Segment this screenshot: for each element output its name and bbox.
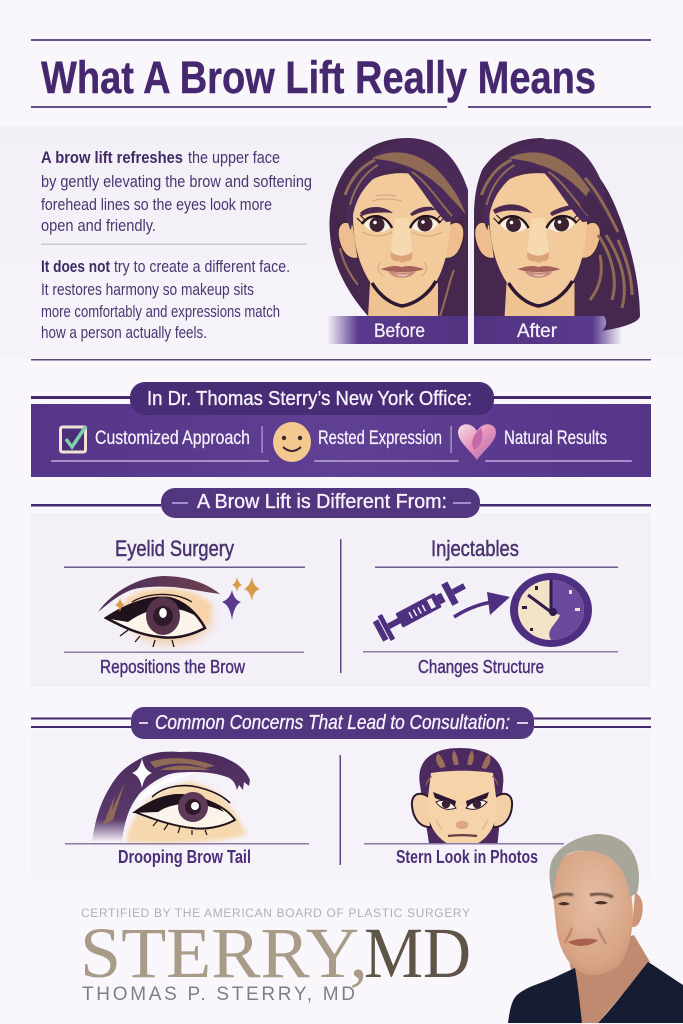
- column: drooping brow tail: Drooping Brow Tail: [118, 847, 251, 867]
- logo: Sterry MD: MD: [364, 913, 471, 993]
- logo: Sterry MD: [80, 906, 471, 1005]
- column: injectables: Changes Structure: [418, 657, 544, 677]
- column: drooping brow tail: [65, 752, 309, 867]
- column: stern look: Stern Look in Photos: [396, 847, 538, 867]
- illustration: drooping brow eye: [92, 752, 250, 844]
- illustration: before face: [330, 138, 468, 318]
- column: injectables: Injectables: [431, 536, 519, 561]
- label: before: [327, 316, 468, 344]
- text block: what a brow lift does: by gently elevating the brow and softening: [41, 172, 312, 191]
- text block: what a brow lift does: forehead lines so the eyes look more: [41, 195, 272, 214]
- text block: what a brow lift does: open and friendly.: [41, 216, 156, 235]
- logo: Sterry MD: CERTIFIED BY THE AMERICAN BOARD OF PLASTIC SURGERY: [81, 906, 470, 920]
- icon: checkbox: [60, 426, 86, 452]
- heading: common concerns: Common Concerns That Lead to Consultation:: [155, 712, 510, 734]
- benefit: rested expression: Rested Expression: [318, 428, 442, 449]
- panel: introduction: [41, 138, 640, 344]
- column: eyelid surgery: Eyelid Surgery: [115, 536, 234, 561]
- panel: common concerns: [31, 707, 651, 879]
- logo: Sterry MD: THOMAS P. STERRY, MD: [82, 984, 355, 1005]
- text block: what a brow lift does not do: more comfortably and expressions match: [41, 302, 280, 321]
- text block: what a brow lift does not do: how a person actually feels.: [41, 323, 207, 342]
- column: eyelid surgery: Repositions the Brow: [100, 657, 246, 677]
- label: before: Before: [374, 321, 425, 342]
- logo: Sterry MD: STERRY,: [80, 913, 368, 993]
- icon: clock: [510, 573, 592, 647]
- text block: what a brow lift does: the upper face: [188, 148, 280, 167]
- text block: what a brow lift does: [41, 148, 312, 235]
- illustration: stern man face: [412, 748, 512, 850]
- icon: heart: [458, 424, 496, 460]
- label: after: [474, 316, 640, 344]
- text block: what a brow lift does not do: try to create a different face.: [114, 257, 290, 276]
- label: after: After: [517, 321, 558, 342]
- heading: common concerns: [131, 707, 534, 739]
- heading: different from: [161, 488, 480, 518]
- text block: what a brow lift does not do: It restores harmony so makeup sits: [41, 280, 254, 299]
- benefit: natural results: Natural Results: [504, 428, 607, 449]
- benefit: customized approach: Customized Approach: [95, 428, 250, 449]
- text block: what a brow lift does not do: It does not: [41, 257, 110, 276]
- arrow: [454, 592, 510, 617]
- text block: what a brow lift does not do: [41, 257, 290, 342]
- column: injectables: [363, 536, 618, 677]
- heading: office: In Dr. Thomas Sterry’s New York Office:: [147, 388, 472, 410]
- column: eyelid surgery: [64, 536, 305, 677]
- text block: what a brow lift does: A brow lift refreshes: [41, 148, 183, 167]
- panel: different from: [31, 488, 651, 687]
- panel: office benefits: [31, 382, 651, 477]
- illustration: eye with sparkles: [98, 576, 260, 647]
- heading: office: [130, 382, 494, 415]
- icon: syringe: [371, 574, 471, 644]
- column: stern look: [364, 748, 564, 867]
- heading: different from: A Brow Lift is Different From:: [197, 491, 447, 513]
- title: What A Brow Lift Really Means: [41, 52, 596, 103]
- illustration: after face: [474, 138, 640, 318]
- icon: smiling face: [273, 422, 311, 462]
- photo: Dr. Sterry portrait: [508, 834, 683, 1023]
